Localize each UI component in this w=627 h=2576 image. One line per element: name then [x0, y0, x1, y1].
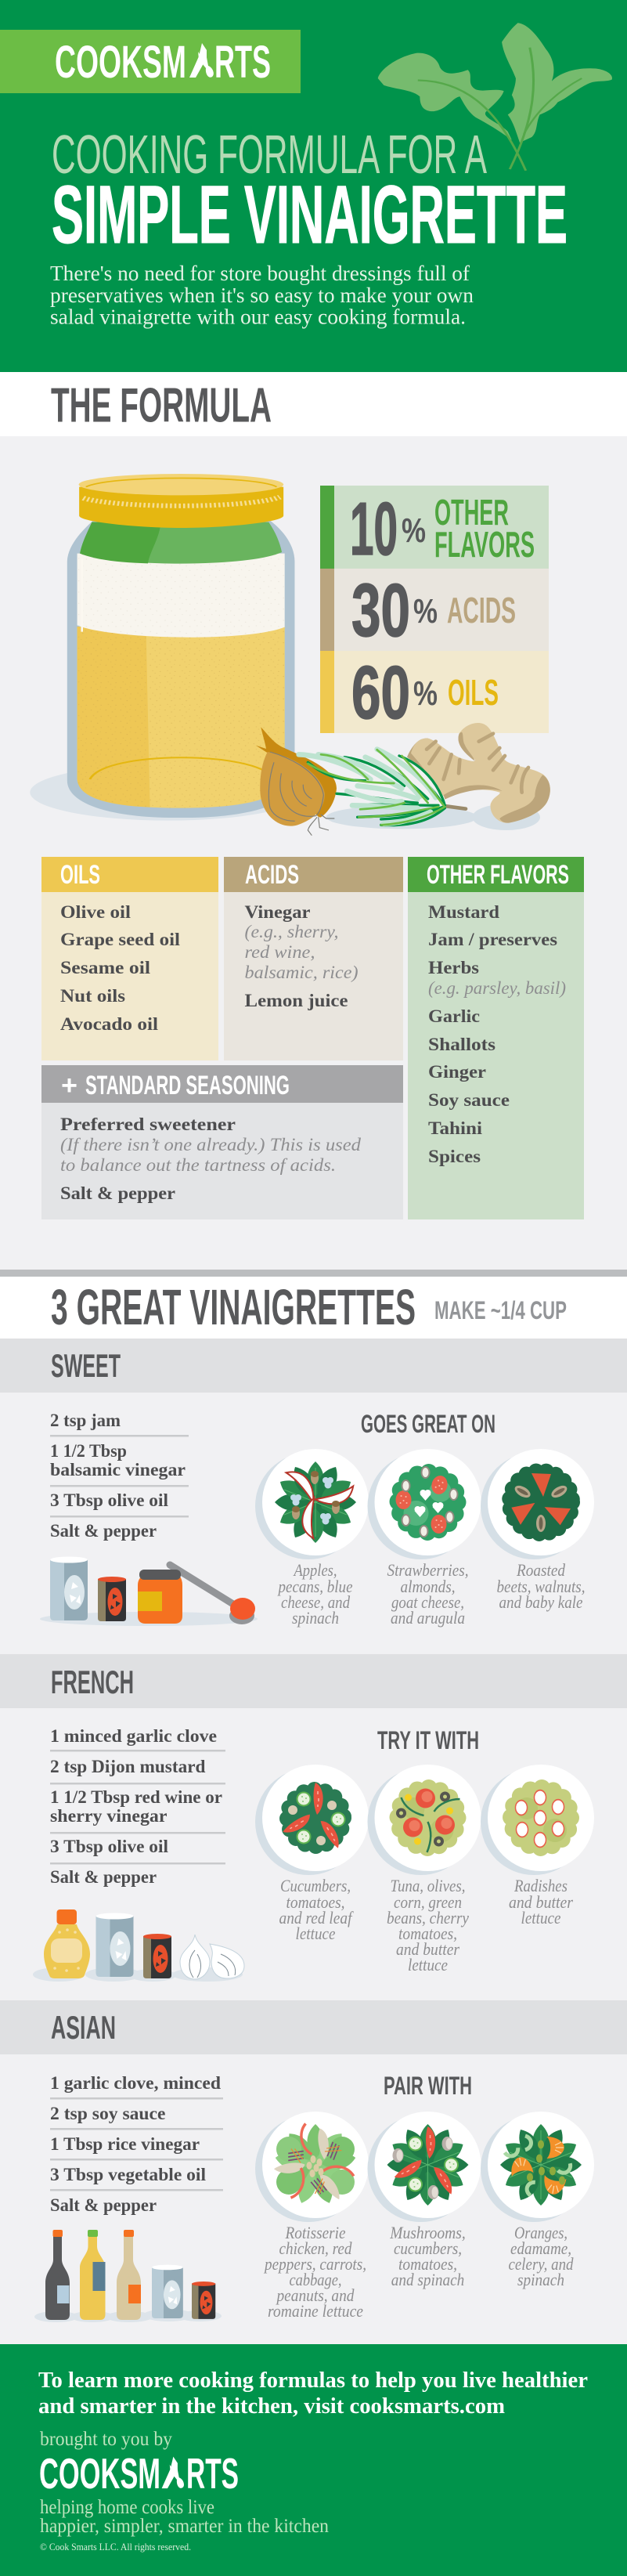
- caption: tuna: tomatoes,: [398, 1924, 457, 1943]
- caption: tuna: corn, green: [394, 1892, 462, 1912]
- legend row: other flavors: OTHER: [434, 492, 509, 533]
- panel: other flavors: Ginger: [428, 1062, 486, 1082]
- plate: strawberries, almonds, goat cheese and arugula: [368, 1449, 481, 1559]
- legend row: other flavors: FLAVORS: [434, 524, 535, 565]
- caption: rotisserie chicken: peppers, carrots,: [263, 2254, 366, 2274]
- caption: tuna: [387, 1876, 469, 1974]
- shallot: [256, 727, 337, 836]
- caption: radishes: and butter: [509, 1892, 573, 1912]
- caption: strawberries: [387, 1560, 468, 1628]
- heading: goes great on: GOES GREAT ON: [361, 1410, 495, 1438]
- legend row: oils: %: [413, 674, 438, 713]
- ingredient list: french: 3 Tbsp olive oil: [50, 1837, 168, 1857]
- rosemary: [299, 750, 466, 826]
- caption: apples: pecans, blue: [277, 1577, 353, 1596]
- caption: rotisserie chicken: romaine lettuce: [268, 2301, 363, 2321]
- section: french vinaigrette: [0, 1654, 627, 1982]
- plate: chicken, peppers, carrots, cabbage, peanuts and romaine: [255, 2112, 369, 2222]
- call to action: [38, 2368, 588, 2419]
- intro text: preservatives when it's so easy to make your own: [50, 283, 474, 307]
- caption: rotisserie chicken: peanuts, and: [276, 2285, 355, 2305]
- ingredient list: sweet: 2 tsp jam: [50, 1411, 121, 1431]
- panel: acids: red wine,: [244, 942, 315, 963]
- caption: mushrooms: tomatoes,: [398, 2254, 457, 2274]
- ingredient list: sweet: Salt & pepper: [50, 1521, 157, 1541]
- legend row: acids: %: [413, 592, 438, 630]
- icon: arugula leaves: [378, 23, 612, 171]
- ingredient list: sweet: balsamic vinegar: [50, 1460, 186, 1480]
- caption: cucumbers: and red leaf: [279, 1908, 354, 1927]
- legend: formula percentages: [320, 486, 549, 735]
- caption: cucumbers: [279, 1876, 354, 1943]
- section heading: french: [0, 1654, 627, 1708]
- section heading: asian: ASIAN: [51, 2009, 116, 2046]
- panel: standard seasoning: to balance out the tartness of acids.: [60, 1155, 336, 1176]
- panel: oils: Nut oils: [60, 986, 125, 1006]
- caption: rotisserie chicken: [263, 2223, 366, 2321]
- caption: mushrooms: [389, 2223, 466, 2289]
- ingredient list: asian: 1 Tbsp rice vinegar: [50, 2134, 200, 2155]
- plate: oranges, edamame, celery and spinach: [481, 2112, 594, 2222]
- caption: strawberries: goat cheese,: [391, 1592, 464, 1612]
- panel: acids: Lemon juice: [244, 991, 348, 1011]
- legend row: oils: OILS: [448, 672, 499, 713]
- panel: acids: balsamic, rice): [244, 963, 359, 983]
- legend row: other flavors: %: [402, 511, 426, 550]
- logo band: [0, 30, 301, 93]
- panel: other flavors: Mustard: [428, 902, 499, 923]
- ingredient list: asian: 3 Tbsp vegetable oil: [50, 2165, 206, 2185]
- caption: tuna: Tuna, olives,: [390, 1876, 465, 1895]
- tagline: [40, 2497, 329, 2537]
- panel: other flavors: Herbs: [428, 958, 479, 978]
- plate: mushrooms, cucumbers, tomatoes and spinach: [368, 2112, 481, 2222]
- legend row: oils: 60: [351, 651, 410, 735]
- panel: other flavors: Shallots: [428, 1035, 495, 1055]
- caption: cucumbers: Cucumbers,: [280, 1876, 351, 1895]
- heading band: the formula: THE FORMULA: [51, 379, 272, 432]
- section heading: french: FRENCH: [51, 1664, 134, 1700]
- heading: pair with: PAIR WITH: [384, 2072, 472, 2100]
- section heading: sweet: [0, 1339, 627, 1393]
- panel: oils: Olive oil: [60, 902, 132, 923]
- ingredient list: french: 1 1/2 Tbsp red wine or: [50, 1787, 222, 1808]
- intro text: [50, 261, 474, 329]
- ingredient list: sweet: [50, 1411, 189, 1541]
- caption: mushrooms: and spinach: [391, 2270, 464, 2289]
- plate: cucumbers, tomatoes and red leaf lettuce: [255, 1765, 369, 1875]
- ingredient list: asian: Salt & pepper: [50, 2195, 157, 2216]
- icon: salt, pepper, jam jar and spoon: [40, 1557, 258, 1626]
- caption: cucumbers: lettuce: [296, 1924, 336, 1943]
- caption: roasted beets: and baby kale: [499, 1592, 583, 1612]
- caption: rotisserie chicken: cabbage,: [290, 2270, 341, 2289]
- plate: tuna, olives, corn, green beans, tomatoes and butter lettuce: [368, 1765, 481, 1875]
- ingredient list: sweet: 1 1/2 Tbsp: [50, 1441, 127, 1461]
- panel: acids: ACIDS: [245, 860, 299, 890]
- panel: other flavors: [408, 857, 584, 1219]
- panel: other flavors: Tahini: [428, 1118, 482, 1139]
- panel: other flavors: (e.g. parsley, basil): [428, 978, 566, 999]
- caption: roasted beets: [496, 1560, 586, 1612]
- panel: other flavors: Spices: [428, 1147, 481, 1167]
- caption: oranges: Oranges,: [514, 2223, 568, 2242]
- caption: mushrooms: Mushrooms,: [389, 2223, 466, 2242]
- caption: radishes: [509, 1876, 573, 1927]
- caption: roasted beets: beets, walnuts,: [496, 1577, 586, 1596]
- ingredient list: asian: [50, 2073, 223, 2216]
- section: asian vinaigrette: [0, 2000, 627, 2322]
- panel: oils: Avocado oil: [60, 1014, 158, 1035]
- caption: rotisserie chicken: chicken, red: [279, 2238, 352, 2258]
- logo band: RTS: [214, 37, 271, 88]
- section heading: sweet: SWEET: [51, 1347, 121, 1384]
- panel: acids: (e.g., sherry,: [244, 922, 338, 942]
- footer logo: COOKSM: [39, 2449, 160, 2498]
- copyright: © Cook Smarts LLC. All rights reserved.: [40, 2542, 191, 2553]
- panel: standard seasoning: Preferred sweetener: [60, 1115, 236, 1135]
- heading band: 3 great vinaigrettes: MAKE ~1/4 CUP: [434, 1296, 567, 1324]
- caption: strawberries: Strawberries,: [387, 1560, 468, 1580]
- caption: oranges: celery, and: [509, 2254, 574, 2274]
- caption: roasted beets: Roasted: [516, 1560, 566, 1580]
- panel: standard seasoning: STANDARD SEASONING: [85, 1071, 290, 1100]
- icon: mustard, salt, pepper and garlic: [33, 1909, 244, 1982]
- caption: apples: Apples,: [293, 1560, 337, 1580]
- intro text: There's no need for store bought dressings full of: [50, 261, 470, 285]
- caption: cucumbers: tomatoes,: [286, 1892, 344, 1912]
- legend row: oils: [320, 651, 549, 735]
- caption: oranges: edamame,: [510, 2238, 571, 2258]
- panel: acids: Vinegar: [244, 902, 310, 923]
- icon: bottles, salt and pepper: [34, 2230, 222, 2322]
- ingredient list: asian: 1 garlic clove, minced: [50, 2073, 221, 2094]
- header panel: [0, 0, 627, 372]
- icon: shallot, rosemary and ginger: [256, 723, 550, 836]
- panel: oils: Grape seed oil: [60, 930, 181, 950]
- panel: oils: [41, 857, 218, 1060]
- caption: rotisserie chicken: Rotisserie: [285, 2223, 346, 2242]
- legend row: acids: 30: [351, 569, 410, 652]
- icon: jar with dressing layers: [30, 474, 306, 821]
- ingredient list: french: Salt & pepper: [50, 1867, 157, 1888]
- panel: standard seasoning: Salt & pepper: [60, 1183, 175, 1204]
- call to action: and smarter in the kitchen, visit cooksmarts.com: [38, 2394, 505, 2419]
- panel: acids: [224, 857, 403, 1060]
- logo band: COOKSM: [55, 37, 186, 88]
- caption: tuna: lettuce: [408, 1955, 448, 1974]
- caption: tuna: and butter: [396, 1939, 459, 1959]
- caption: apples: spinach: [292, 1608, 339, 1628]
- caption: mushrooms: cucumbers,: [394, 2238, 462, 2258]
- caption: apples: cheese, and: [281, 1592, 351, 1612]
- panel: other flavors: Soy sauce: [428, 1090, 510, 1111]
- caption: apples: [277, 1560, 353, 1628]
- caption: oranges: [509, 2223, 574, 2289]
- ingredient list: french: 2 tsp Dijon mustard: [50, 1757, 205, 1777]
- section heading: asian: [0, 2000, 627, 2054]
- ingredient list: french: [50, 1726, 225, 1888]
- plate: radishes and butter lettuce: [481, 1765, 594, 1875]
- panel: oils: OILS: [60, 860, 100, 890]
- section: sweet vinaigrette: [0, 1339, 627, 1628]
- tagline: helping home cooks live: [40, 2497, 214, 2518]
- caption: tuna: beans, cherry: [387, 1908, 469, 1927]
- footer panel: [0, 2344, 627, 2576]
- intro text: salad vinaigrette with our easy cooking formula.: [50, 304, 466, 329]
- caption: radishes: Radishes: [513, 1876, 568, 1895]
- caption: strawberries: and arugula: [391, 1608, 465, 1628]
- panel: other flavors: Garlic: [428, 1006, 480, 1027]
- caption: strawberries: almonds,: [401, 1577, 456, 1596]
- ingredient list: sweet: 3 Tbsp olive oil: [50, 1490, 168, 1511]
- heading: try it with: TRY IT WITH: [377, 1726, 479, 1754]
- panel: standard seasoning: +: [61, 1071, 77, 1100]
- ingredient list: french: sherry vinegar: [50, 1806, 168, 1826]
- call to action: To learn more cooking formulas to help you live healthier: [38, 2368, 588, 2393]
- plate: roasted beets, walnuts and baby kale: [481, 1449, 594, 1559]
- panel: standard seasoning: (If there isn’t one already.) This is used: [60, 1135, 361, 1155]
- ingredient list: french: 1 minced garlic clove: [50, 1726, 217, 1747]
- panel: other flavors: Jam / preserves: [428, 930, 557, 950]
- footer logo: RTS: [186, 2449, 239, 2498]
- tagline: happier, simpler, smarter in the kitchen: [40, 2516, 329, 2537]
- caption: radishes: lettuce: [521, 1908, 561, 1927]
- caption: oranges: spinach: [517, 2270, 564, 2289]
- legend row: acids: [320, 569, 549, 652]
- legend row: other flavors: [320, 486, 549, 571]
- plate: apples, pecans, blue cheese and spinach: [255, 1449, 369, 1559]
- heading band: the formula: [0, 372, 627, 436]
- legend row: acids: ACIDS: [447, 590, 516, 630]
- legend row: other flavors: 10: [350, 487, 398, 571]
- ingredient list: asian: 2 tsp soy sauce: [50, 2104, 166, 2124]
- credit line: brought to you by: [40, 2429, 172, 2450]
- panel: standard seasoning: [41, 1065, 403, 1219]
- ginger: [407, 723, 550, 823]
- panel: oils: Sesame oil: [60, 958, 151, 978]
